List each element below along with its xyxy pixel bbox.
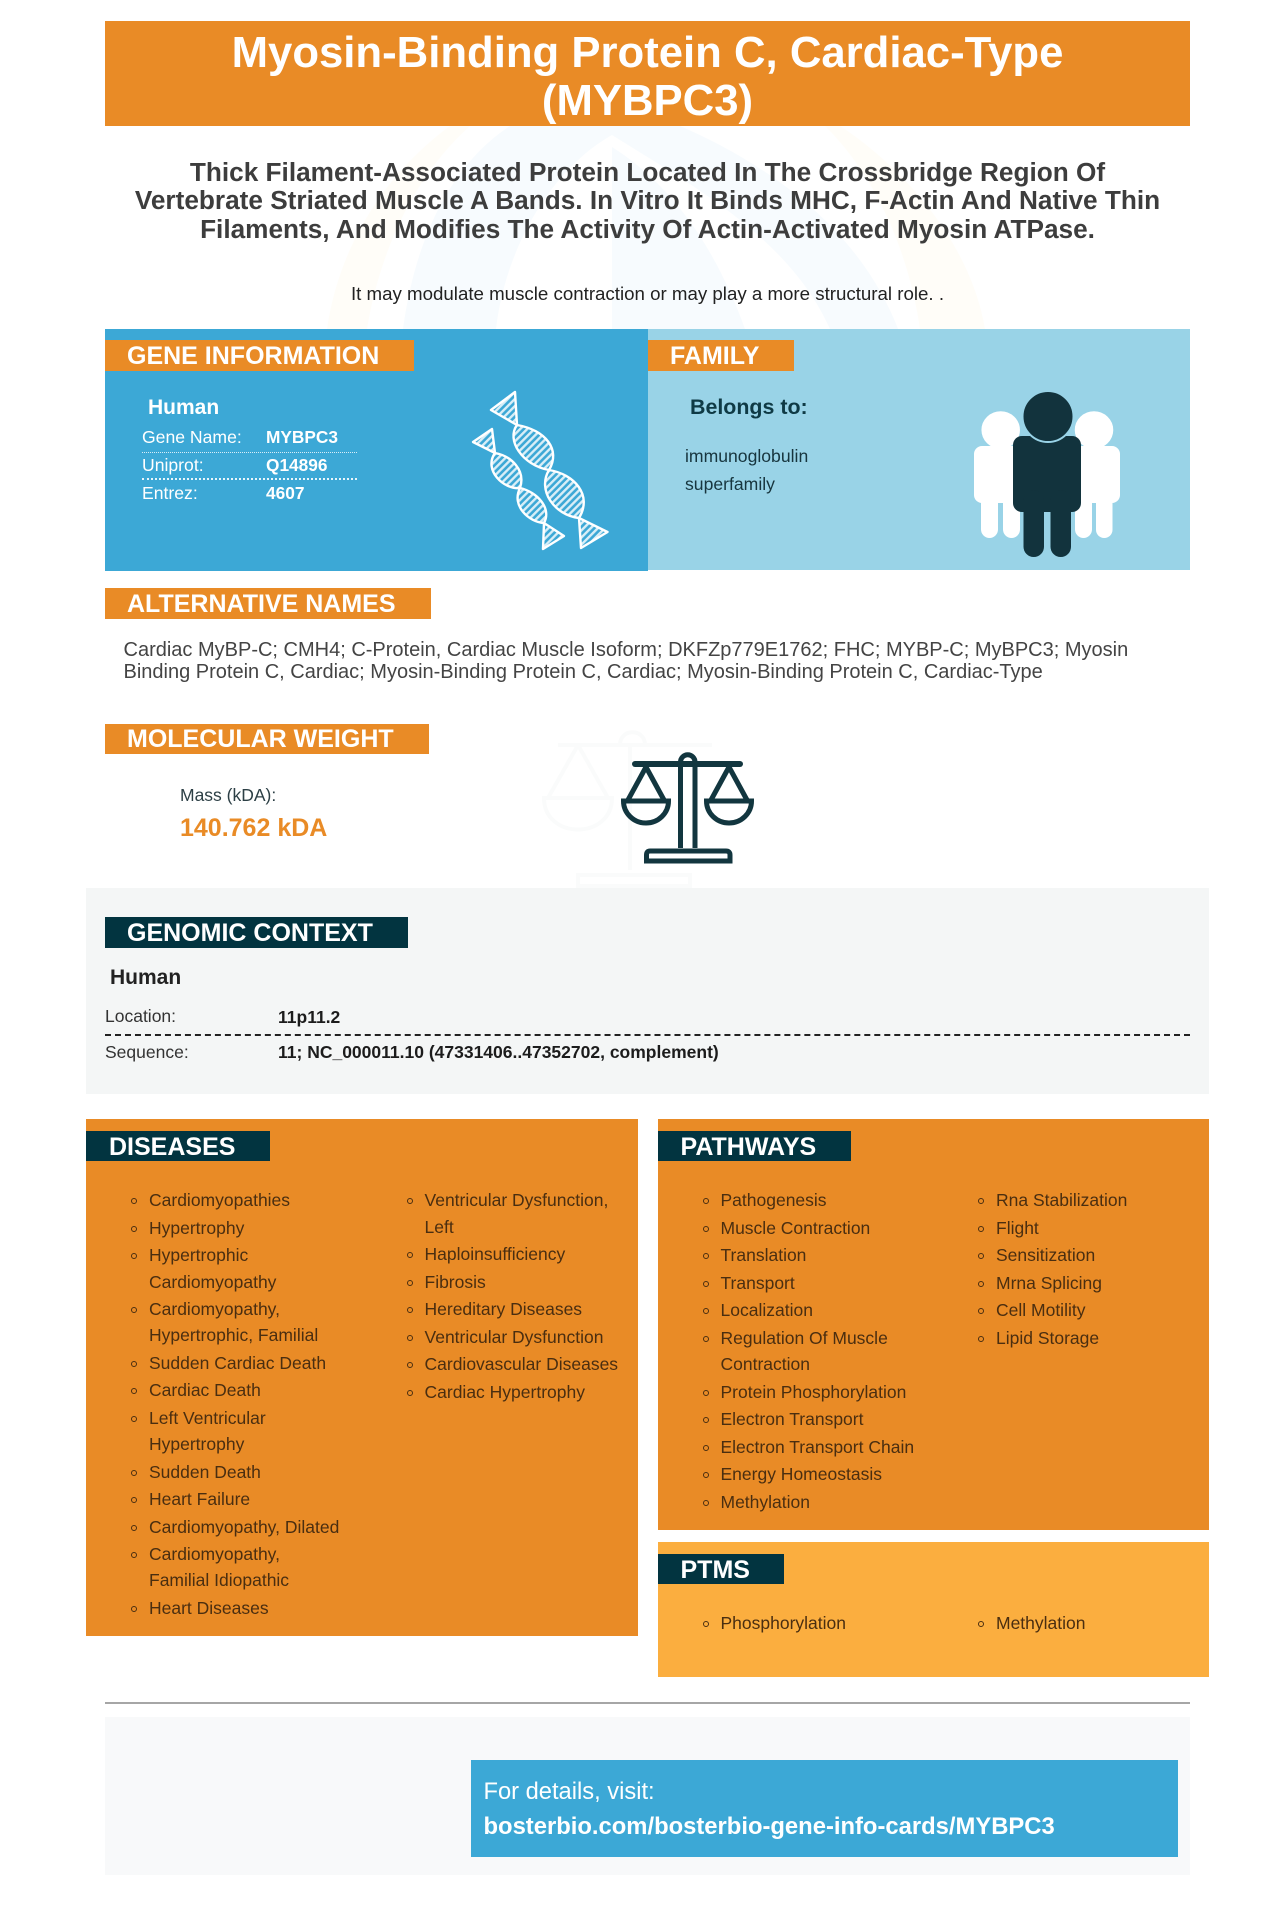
heading: alternative names: ALTERNATIVE NAMES (127, 590, 396, 618)
list: diseases column 2: Hereditary Diseases (424, 1299, 582, 1319)
list: pathways column 1: Translation (720, 1245, 806, 1265)
panel: pathways (658, 1119, 1209, 1530)
list: diseases column 1: Cardiomyopathy, (149, 1544, 280, 1564)
function note: It may modulate muscle contraction or may play a more structural role. . (351, 283, 944, 304)
species label: Human (148, 396, 219, 419)
list: pathways column 2: Sensitization (996, 1245, 1095, 1265)
uniprot row (142, 457, 357, 480)
heading: family: FAMILY (670, 342, 759, 370)
subtitle description: Vertebrate Striated Muscle A Bands. In Vitro It Binds MHC, F-Actin And Native Thin (135, 185, 1160, 215)
list: diseases column 1 (131, 1190, 339, 1618)
icon: faint scale watermark (530, 720, 730, 890)
list: diseases column 1: Cardiomyopathy, Dilated (149, 1517, 339, 1537)
background watermark (0, 126, 1288, 329)
list: diseases column 2: Fibrosis (424, 1272, 486, 1292)
heading: diseases (86, 1131, 270, 1161)
list: pathways column 1: Pathogenesis (720, 1190, 827, 1210)
entrez row: 4607 (266, 483, 304, 503)
icon: DNA helix (472, 390, 609, 550)
list: diseases column 1: Cardiomyopathy, (149, 1299, 280, 1319)
title banner (105, 21, 1190, 126)
list: diseases column 1: Sudden Cardiac Death (149, 1353, 326, 1373)
list: diseases column 1: Cardiomyopathies (149, 1190, 290, 1210)
location row: Location: (105, 1006, 176, 1026)
icon: balance scale (621, 752, 754, 864)
list: pathways column 1: Regulation Of Muscle (720, 1328, 888, 1348)
list: PTMs column 1: Phosphorylation (720, 1613, 846, 1633)
heading: family (648, 340, 794, 371)
list: diseases column 1: Heart Failure (149, 1489, 250, 1509)
uniprot row: Q14896 (266, 455, 328, 475)
list: diseases column 2: Ventricular Dysfunction, (424, 1190, 608, 1210)
list: diseases column 2: Cardiovascular Diseases (424, 1354, 618, 1374)
gene name row (142, 429, 357, 453)
heading: PTMs (658, 1554, 784, 1584)
list: diseases column 1: Heart Diseases (149, 1598, 269, 1618)
family text: superfamily (685, 474, 775, 494)
gene name row: Gene Name: (142, 427, 242, 447)
list: diseases column 1: Familial Idiopathic (149, 1570, 289, 1590)
panel: diseases (86, 1119, 638, 1636)
list: pathways column 1: Energy Homeostasis (720, 1464, 882, 1484)
list: diseases column 2 (407, 1190, 618, 1402)
list: diseases column 1: Left Ventricular (149, 1408, 266, 1428)
list: PTMs column 2: Methylation (996, 1613, 1086, 1633)
sequence row: Sequence: (105, 1042, 189, 1062)
belongs to label: Belongs to: (690, 395, 808, 419)
list: diseases column 2: Ventricular Dysfunction (424, 1327, 603, 1347)
location value: 11p11.2 (278, 1007, 340, 1027)
alternative names text: Binding Protein C, Cardiac; Myosin-Binding Protein C, Cardiac; Myosin-Binding Protein C, Cardiac-Type (124, 661, 1043, 683)
heading: diseases: DISEASES (109, 1133, 235, 1161)
list: pathways column 1 (703, 1190, 914, 1512)
alternative names text (124, 639, 1128, 683)
icon: people group (974, 392, 1120, 557)
panel: footer (105, 1717, 1190, 1875)
family text: immunoglobulin (685, 446, 808, 466)
panel: gene information (105, 329, 648, 571)
entrez row: Entrez: (142, 483, 198, 503)
list: diseases column 2: Haploinsufficiency (424, 1244, 565, 1264)
heading: pathways (658, 1131, 851, 1161)
sequence value: 11; NC_000011.10 (47331406..47352702, complement) (278, 1042, 719, 1062)
list: pathways column 2: Cell Motility (996, 1300, 1085, 1320)
list: pathways column 1: Methylation (720, 1492, 810, 1512)
list: pathways column 2 (978, 1190, 1127, 1348)
callout: details link (471, 1760, 1178, 1857)
callout label: For details, visit: (484, 1779, 655, 1805)
list: pathways column 1: Electron Transport Chain (720, 1437, 914, 1457)
callout URL: bosterbio.com/bosterbio-gene-info-cards/MYBPC3 (484, 1813, 1055, 1840)
list: pathways column 2: Mrna Splicing (996, 1273, 1102, 1293)
title banner: (MYBPC3) (542, 76, 753, 124)
panel: PTMs (658, 1542, 1209, 1677)
heading: genomic context: GENOMIC CONTEXT (127, 919, 373, 947)
subtitle description (135, 156, 1160, 244)
list: pathways column 1: Electron Transport (720, 1409, 863, 1429)
family text (685, 446, 808, 494)
title banner: Myosin-Binding Protein C, Cardiac-Type (232, 28, 1063, 76)
heading: molecular weight: MOLECULAR WEIGHT (127, 725, 394, 753)
heading: pathways: PATHWAYS (680, 1133, 816, 1161)
list: pathways column 2: Lipid Storage (996, 1328, 1099, 1348)
list: pathways column 1: Muscle Contraction (720, 1218, 870, 1238)
heading: PTMs: PTMS (680, 1556, 750, 1584)
heading: gene information: GENE INFORMATION (127, 342, 379, 370)
list: diseases column 1: Cardiomyopathy (149, 1272, 276, 1292)
gene name row: MYBPC3 (266, 427, 338, 447)
list: diseases column 1: Hypertrophy (149, 1218, 244, 1238)
list: diseases column 1: Hypertrophic (149, 1245, 248, 1265)
list: pathways column 2: Flight (996, 1218, 1039, 1238)
subtitle description: Thick Filament-Associated Protein Located In The Crossbridge Region Of (190, 156, 1105, 186)
list: diseases column 1: Cardiac Death (149, 1380, 261, 1400)
alternative names text: Cardiac MyBP-C; CMH4; C-Protein, Cardiac Muscle Isoform; DKFZp779E1762; FHC; MYBP-C; MyBPC3; Myosin (124, 639, 1128, 661)
list: diseases column 1: Sudden Death (149, 1462, 261, 1482)
list: diseases column 2: Left (424, 1217, 454, 1237)
list: pathways column 1: Localization (720, 1300, 813, 1320)
list: diseases column 2: Cardiac Hypertrophy (424, 1382, 585, 1402)
mass value: 140.762 kDA (180, 814, 327, 842)
entrez row (142, 483, 304, 503)
list: diseases column 1: Hypertrophy (149, 1434, 244, 1454)
panel: genomic context (86, 888, 1209, 1094)
list: pathways column 2: Rna Stabilization (996, 1190, 1127, 1210)
subtitle description: Filaments, And Modifies The Activity Of Actin-Activated Myosin ATPase. (200, 214, 1095, 244)
list: diseases column 1: Hypertrophic, Familial (149, 1325, 318, 1345)
list: pathways column 1: Protein Phosphorylation (720, 1382, 906, 1402)
species label: Human (110, 966, 181, 989)
panel: family (648, 329, 1190, 570)
list: pathways column 1: Transport (720, 1273, 795, 1293)
list: pathways column 1: Contraction (720, 1354, 810, 1374)
mass label: Mass (kDA): (180, 785, 276, 805)
uniprot row: Uniprot: (142, 455, 204, 475)
